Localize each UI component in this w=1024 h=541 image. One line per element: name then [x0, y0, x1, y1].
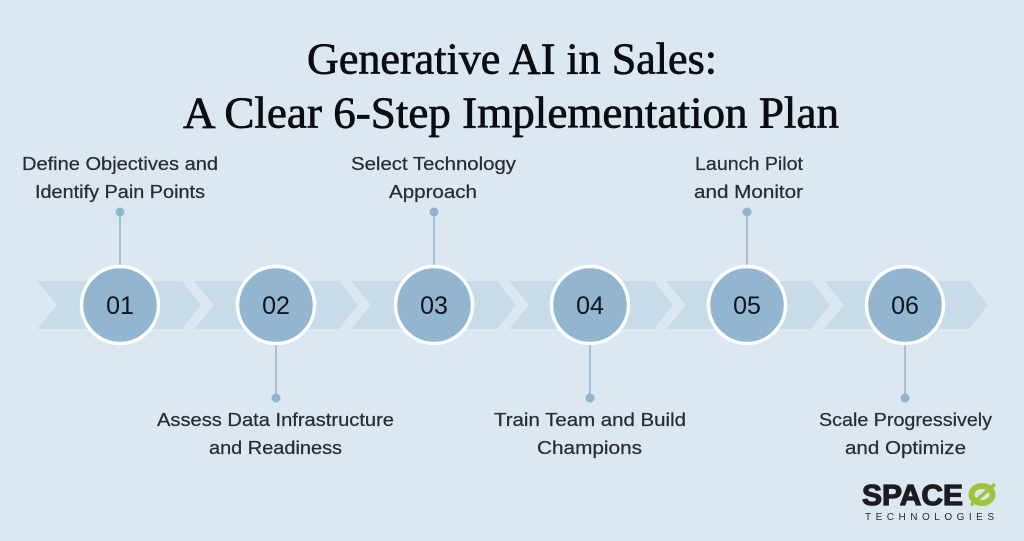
step 05 label	[694, 153, 803, 202]
step 01	[22, 153, 218, 344]
step 02 label	[157, 409, 394, 458]
step 02 label: Assess Data Infrastructure	[157, 409, 394, 430]
step 06 connector	[900, 344, 910, 402]
title: A Clear 6-Step Implementation Plan	[183, 88, 839, 138]
step 04 badge: 04	[576, 292, 604, 320]
step 03 label: Select Technology	[351, 153, 517, 174]
step 04 connector	[586, 344, 594, 402]
step 05	[694, 153, 803, 344]
step 05 badge	[708, 266, 786, 344]
step 02 label: and Readiness	[209, 437, 342, 458]
step 01 connector	[116, 208, 124, 266]
logo: Space-O Technologies	[862, 480, 995, 523]
step 05 connector	[742, 208, 752, 266]
step 06 label: and Optimize	[845, 437, 966, 458]
step 01 label	[22, 153, 218, 202]
step 03 label	[351, 153, 517, 202]
title	[183, 34, 839, 138]
step 01 badge: 01	[106, 292, 134, 320]
chevron arrow band	[37, 281, 988, 329]
step 02 connector	[272, 344, 280, 402]
step 03 connector	[430, 208, 438, 266]
step 04 label: Champions	[537, 437, 642, 458]
step 01 badge	[82, 266, 158, 344]
step 05 badge: 05	[733, 292, 761, 320]
logo: Space-O Technologies: TECHNOLOGIES	[865, 512, 994, 523]
step 03	[351, 153, 517, 344]
step 03 badge	[396, 266, 472, 344]
step 03 badge: 03	[420, 292, 448, 320]
step 05 label: and Monitor	[694, 181, 803, 202]
step 05 label: Launch Pilot	[695, 153, 803, 174]
logo: Space-O Technologies: SPACE	[862, 480, 963, 512]
step 04	[494, 266, 686, 458]
step 06 label	[819, 409, 993, 458]
step 06 label: Scale Progressively	[819, 409, 993, 430]
step 06 badge	[866, 266, 944, 344]
step 02 badge	[238, 266, 314, 344]
step 02 badge: 02	[262, 292, 290, 320]
step 02	[157, 266, 394, 458]
icon: green slashed O	[971, 484, 995, 505]
step 01 label: Identify Pain Points	[35, 181, 205, 202]
step 06	[819, 266, 993, 458]
step 04 label	[494, 409, 686, 458]
step 04 badge	[552, 266, 628, 344]
title: Generative AI in Sales:	[307, 34, 717, 84]
step 01 label: Define Objectives and	[22, 153, 218, 174]
step 06 badge: 06	[891, 292, 919, 320]
step 03 label: Approach	[389, 181, 477, 202]
step 04 label: Train Team and Build	[494, 409, 686, 430]
